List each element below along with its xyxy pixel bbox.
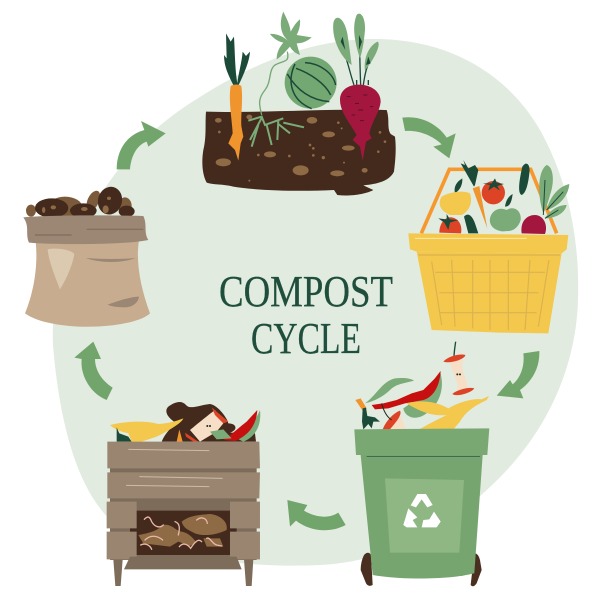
small apple piece <box>382 403 406 429</box>
panel: compost sack <box>23 184 150 327</box>
panel: shopping basket <box>408 160 569 333</box>
compost in sack <box>26 184 135 218</box>
bin wheels <box>361 553 482 586</box>
cucumber top <box>519 164 530 195</box>
arrow: basket to bin <box>497 351 539 398</box>
green apple <box>490 194 521 231</box>
sack body <box>25 241 150 327</box>
bin body <box>361 455 483 579</box>
title <box>219 267 393 363</box>
box planks <box>107 442 260 498</box>
arrow: bin to compost box <box>287 500 346 530</box>
carrot in basket <box>461 160 487 228</box>
cucumber lower <box>464 215 478 233</box>
soil <box>202 110 396 195</box>
apple core <box>185 407 228 442</box>
compost lumps <box>138 514 227 547</box>
arrow: compost box to sack <box>74 342 113 400</box>
banana peel <box>110 418 183 442</box>
basket handle <box>421 169 557 233</box>
basket body <box>417 252 562 333</box>
worms <box>141 517 222 549</box>
basket rim <box>408 233 568 253</box>
basket weave <box>418 255 560 330</box>
panel: compost box <box>107 402 260 586</box>
compost heap <box>162 402 256 442</box>
lid shadow <box>367 456 480 458</box>
bin lid <box>354 428 489 455</box>
box base <box>124 557 242 569</box>
sack highlight <box>48 249 74 289</box>
title: COMPOST <box>219 267 393 316</box>
carrot top and stem <box>355 398 380 429</box>
title: CYCLE <box>251 314 361 363</box>
recycling symbol <box>403 494 441 527</box>
tomato top <box>482 178 505 204</box>
beet <box>333 14 381 161</box>
watermelon rind <box>223 410 260 442</box>
sack collar <box>23 215 148 244</box>
green peel and leaf <box>365 372 442 418</box>
basket rim highlight <box>415 237 527 240</box>
beet leaves <box>539 165 569 218</box>
carrot and leaf bits <box>117 427 232 442</box>
recycling label <box>385 478 464 553</box>
box legs <box>113 559 253 586</box>
soil lumps <box>215 115 386 182</box>
watermelon plant <box>248 12 337 147</box>
background blob <box>53 39 578 566</box>
banana peel <box>407 396 489 429</box>
tomato lower <box>438 214 461 233</box>
collar folds <box>35 229 143 235</box>
beet in basket <box>521 215 546 234</box>
arrow: sack to garden <box>117 121 166 169</box>
panel: garden soil with vegetables <box>202 12 396 195</box>
watermelon rind <box>372 371 441 409</box>
compost window <box>130 511 237 555</box>
yellow pepper <box>440 178 471 215</box>
apple core <box>443 342 474 395</box>
box back <box>110 467 257 560</box>
carrot <box>224 33 250 161</box>
panel: recycling bin <box>354 342 489 586</box>
plank highlights <box>126 449 223 487</box>
side posts <box>107 502 260 559</box>
arrow: garden to basket <box>402 117 456 158</box>
sack creases <box>86 258 139 307</box>
